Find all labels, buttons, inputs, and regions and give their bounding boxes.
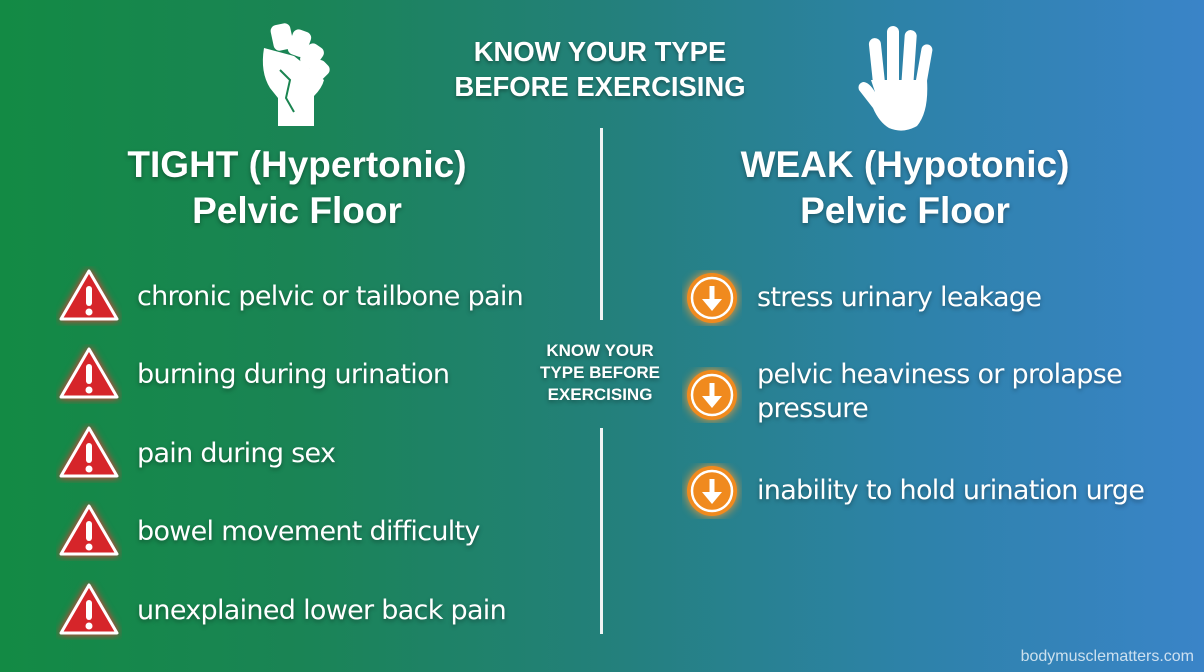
heading: tight [126, 144, 467, 231]
middle label [540, 341, 660, 404]
list: tight symptoms [56, 266, 524, 640]
divider bottom [600, 428, 603, 634]
title: BEFORE EXERCISING [454, 71, 746, 102]
heading: weak: WEAK (Hypotonic) [741, 144, 1069, 185]
item 1: chronic pelvic or tailbone pain [137, 281, 523, 312]
heading: tight: TIGHT (Hypertonic) [127, 144, 467, 185]
item 2 [56, 344, 450, 404]
icon: open hand [858, 26, 932, 131]
middle label: KNOW YOUR [546, 341, 654, 360]
item 2: pelvic heaviness or prolapse [757, 359, 1122, 390]
item 1 [56, 266, 524, 326]
title [454, 36, 746, 102]
item 3: inability to hold urination urge [757, 475, 1144, 506]
item 4: bowel movement difficulty [137, 516, 480, 547]
icon: fist [262, 23, 330, 126]
middle label: TYPE BEFORE [540, 363, 660, 382]
footer credit: bodymusclematters.com [1021, 648, 1194, 665]
heading: weak [740, 144, 1070, 231]
heading: tight: Pelvic Floor [192, 190, 402, 231]
item 4 [56, 501, 480, 561]
item 2: pressure [757, 393, 868, 424]
item 5 [56, 580, 506, 640]
item 1 [682, 270, 1042, 326]
item 2 [682, 359, 1124, 426]
list: weak symptoms [682, 270, 1146, 519]
item 1: stress urinary leakage [757, 282, 1041, 313]
item 5: unexplained lower back pain [137, 595, 506, 626]
item 3 [56, 423, 335, 483]
middle label: EXERCISING [548, 385, 652, 404]
item 3: pain during sex [137, 438, 335, 469]
divider top [600, 128, 603, 320]
item 3 [682, 463, 1146, 519]
title: KNOW YOUR TYPE [474, 36, 726, 67]
heading: weak: Pelvic Floor [800, 190, 1010, 231]
item 2: burning during urination [137, 359, 449, 390]
